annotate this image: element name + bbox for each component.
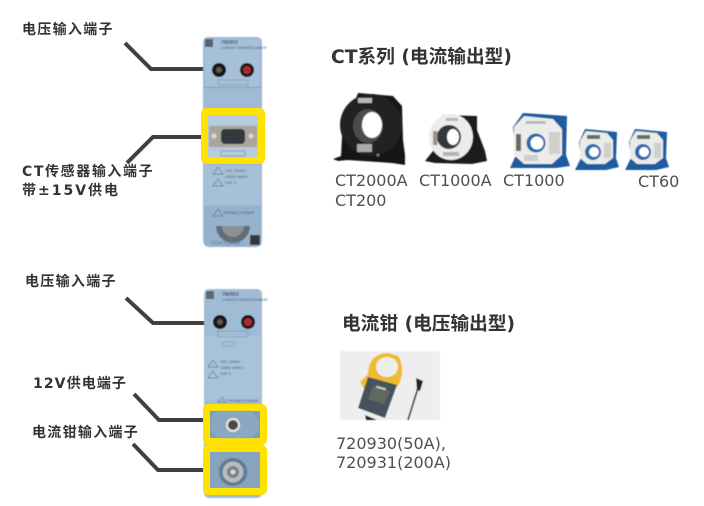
heading: CT series: CT系列 (电流输出型) <box>331 46 512 68</box>
leader line: CT sensor input <box>127 137 206 163</box>
model labels: current clamp <box>336 434 451 472</box>
model labels: CT series: CT1000 <box>503 171 565 190</box>
label: voltage input terminal (bottom): 电压输入端子 <box>25 273 117 290</box>
product: CT2000A/CT200 sensor <box>333 93 405 165</box>
device: CT input module: 760903 <box>221 40 238 46</box>
device: clamp input module: Y0C 1500V <box>220 359 241 364</box>
device: CT input module: YOKOGAWA <box>211 241 241 247</box>
product: CT60 sensor (right) <box>625 129 669 170</box>
heading: current clamp: 电流钳 (电压输出型) <box>342 313 515 335</box>
device: clamp input module: 760903 <box>222 292 239 298</box>
model labels: CT series: CT1000A <box>419 171 492 190</box>
label: clamp input terminal: 电流钳输入端子 <box>32 424 139 441</box>
device: CT input module: Y0C 1500V <box>225 168 246 173</box>
model labels: current clamp: 720930(50A), <box>336 434 446 453</box>
model labels: CT series <box>335 171 679 210</box>
leader line: voltage input (top) <box>125 43 206 69</box>
connector: BNC socket <box>219 458 247 486</box>
device: clamp input module: CURRENT SENSOR ELEMENT <box>222 298 268 302</box>
leader line: voltage input (bottom) <box>126 298 206 323</box>
product: CT1000A sensor <box>425 114 487 164</box>
highlight: 12V supply connector <box>206 408 264 442</box>
model labels: CT series: CT60 <box>638 172 679 191</box>
leader line: 12V supply <box>134 394 212 420</box>
label: CT sensor input terminal with 15V supply <box>22 163 154 199</box>
connector: D-sub port <box>209 126 257 156</box>
label: CT sensor input terminal with 15V supply: CT传感器输入端子 <box>22 163 154 180</box>
label: 12V supply terminal: 12V供电端子 <box>33 376 127 392</box>
device: clamp input module: PROBE POWER <box>228 398 258 403</box>
device: clamp input module <box>204 289 268 498</box>
leader line: clamp input <box>133 444 212 470</box>
device: clamp input module: 1000V MAX2 <box>220 365 244 370</box>
label: voltage input terminal (top): 电压输入端子 <box>22 21 114 38</box>
product: current clamp photo <box>340 351 440 420</box>
model labels: CT series: CT2000A <box>335 171 408 190</box>
highlight: clamp BNC input <box>206 448 264 492</box>
model labels: CT series: CT200 <box>335 191 386 210</box>
device: CT input module: PROBE POWER <box>224 210 254 215</box>
device: clamp input module: CAT II <box>220 371 231 376</box>
device: CT input module: CAT II <box>225 180 236 185</box>
connector: 12V round socket <box>211 411 259 438</box>
device: CT input module <box>203 37 267 247</box>
device: CT input module: 1000V MAX2 <box>225 174 249 179</box>
label: CT sensor input terminal with 15V supply: 带±15V供电 <box>22 183 120 199</box>
product: CT1000 sensor <box>510 113 570 168</box>
product: CT60-class sensor (left) <box>575 129 619 170</box>
model labels: current clamp: 720931(200A) <box>336 453 451 472</box>
device: CT input module: CURRENT SENSOR ELEMENT <box>221 46 267 50</box>
highlight: CT sensor input connector <box>204 112 262 160</box>
